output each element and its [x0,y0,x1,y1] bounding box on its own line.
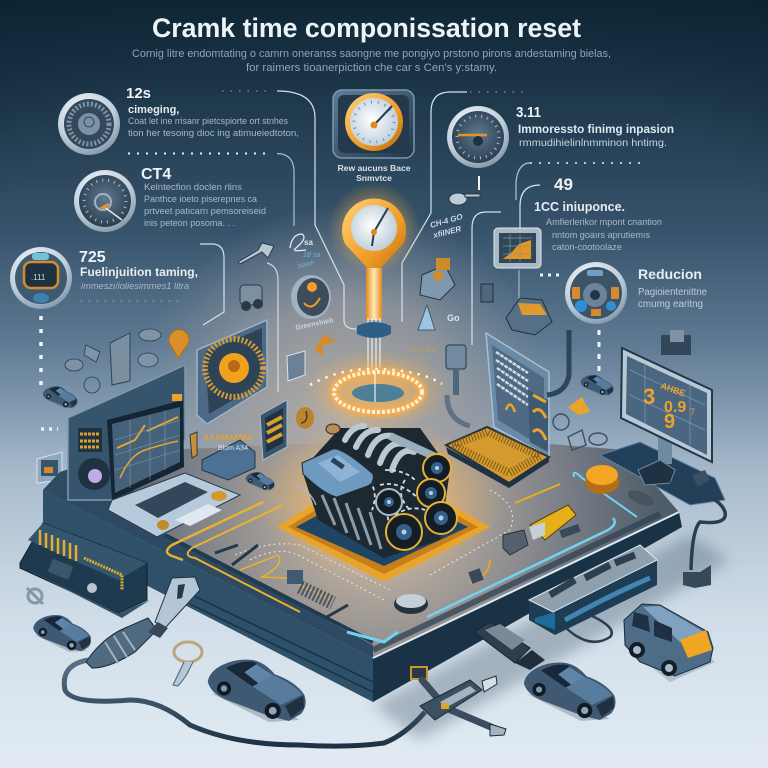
panel: central gauge: Rew aucuns Bace [337,163,411,173]
callout: 12s timing: 12s [126,85,151,102]
laptop keyboard [446,427,549,488]
callout: 725 fuel injection timing: immeszi/ioliesimmes1 litra [81,281,189,292]
callout: 49 1CC influence: 49 [554,175,573,194]
icon: grey tile [287,351,305,381]
icon: pump [420,258,455,300]
small clutter icons upper left [37,234,336,483]
icon: gold ingots [529,505,576,540]
icon: small lever [481,284,493,302]
callout: 12s timing: Coat let ine rrisanr pietcspiorte ort stnhes [128,116,288,127]
icon: orange coin [296,407,314,429]
icon: cable foot [683,565,711,588]
icon: wrench small [449,193,480,205]
pulleys [376,454,457,550]
label: upper caption: xfiINER [431,224,462,240]
track lines [167,473,637,642]
icon: round chip [394,594,428,614]
label: Qsa loop [290,234,320,270]
monitor screen: 7 [690,407,695,417]
callout: CT4: prtveet paticarn pemsoreiseid [144,206,266,217]
middle props on platform [190,400,348,618]
monitor screen: AHBE [659,380,687,399]
icon: glow ring with dotted halo [306,350,450,430]
icon: engine part [240,285,263,311]
cable boot [86,618,157,668]
cable from monitor [670,483,725,570]
icon: coin dial [291,275,331,319]
platform left side [43,490,373,702]
monitor screen: 9 [664,411,675,433]
right parts cluster [418,193,691,450]
icon: mini machine: Blom A34 [218,445,248,452]
gooseneck hose [547,330,569,395]
icon: tools on the track [215,545,348,618]
car: sedan center [208,660,306,722]
icon: orange tool [314,335,336,356]
icon: orange disc [585,465,619,494]
icon: finned pill [626,487,656,509]
lower fins [322,495,381,549]
icon: picture card [37,452,62,483]
silver tube [390,436,442,460]
icon: orange trace [470,560,490,583]
car: sedan right [524,663,616,721]
subtitle: Cornig litre endomtating o camrn oneranss saongne me pongiyo prstono pirons andestaming bielas, [132,48,611,60]
icon: round speed gauge [74,170,136,232]
callout: 3.11: Immoressto finimg inpasion [518,124,674,136]
panel: central gauge [333,90,414,183]
engine clutter [365,470,425,535]
platform [43,440,730,740]
icon: round dial 12s [58,93,120,155]
callout: 12s timing: tion her tesoing dioc ing atimueiedtoton, [128,128,299,139]
forked connector tool [411,667,506,736]
icon: dashboard gauge [447,106,509,168]
monitor screen: 3 [643,384,655,409]
callout: reduction: cmumg earitng [638,299,703,310]
oil cap [326,424,340,434]
callout: 12s timing [58,85,299,155]
back panel [68,365,185,500]
icon: tablet [260,400,287,460]
label: upper caption [429,212,464,240]
label: go: Go [447,313,460,323]
callout: CT4 [74,166,266,232]
callout: 49 1CC influence: caton-cootoolaze [552,242,622,253]
icon: orange stack [568,397,590,415]
valve cover [302,449,373,497]
engine block [302,428,450,558]
subtitle: for raimers tioanerpiction che car s Cen's y:stamy. [246,62,497,74]
icon: small car on platform [246,472,275,490]
monitor [600,348,725,588]
label: upper caption: CH-4 GO [429,212,464,230]
connector lines [41,91,640,429]
callout: 3.11 [447,104,674,168]
plug head [148,577,200,638]
intake ribs [345,426,414,470]
monitor screen: 0.9 [664,399,686,416]
callout: 49 1CC influence: Amfierlerikor mpont cnantion [546,217,662,228]
icon: chips [468,524,581,584]
right device box [529,545,657,642]
monitor stand [658,432,672,464]
icon: sketch gears [553,414,607,450]
callout: reduction [565,262,708,324]
callout: CT4: Panthce ioeto piserepnes ca [144,194,258,205]
icon: key [173,642,202,686]
label: Qsa loop: statch [297,259,316,270]
icon: gauge pin with tube [328,182,420,372]
label: Qsa loop: sa [304,238,313,247]
cable [64,660,425,746]
icon: tall module [110,333,130,385]
left hardware module [20,523,150,618]
center right laptop [408,330,569,488]
icon: flask [418,305,435,330]
small clutter icons upper left: Greenshieb [295,317,334,332]
callout: 725 fuel injection timing: Fuelinjuition taming, [80,265,198,279]
platform top surface [43,440,679,658]
desk unit [638,460,710,487]
right platform items [394,465,656,614]
left laptop and display [68,365,240,537]
icon: digital meter: .111 [31,273,46,282]
icon: orange car [506,298,552,335]
label: orange caption: A A AAAAAAAA [204,433,252,442]
callout: CT4: inis peteon posoma. . . [144,218,235,229]
callout: 725 fuel injection timing: 725 [79,249,106,266]
icon: gauge slab [197,320,267,424]
icon: small car [43,386,77,408]
callout: 3.11: 3.11 [516,104,541,121]
connector hose left: ###### [410,357,431,363]
connector hose left [408,345,470,426]
connector hose left: STRON [408,347,438,354]
label: Qsa loop: 18 sa [303,252,320,259]
icon: mini machine [202,440,255,480]
tangled hoses [296,485,316,505]
icon: gray cube [503,530,528,555]
left plug and cable [64,577,425,746]
icon: chart thumbnail [494,228,541,268]
icon: digital meter [10,247,72,309]
callout: 3.11: rmmudihielinlnmminon hntimg. [519,137,667,149]
icon: wrench [238,243,274,264]
panel: central gauge: Snmvtce [356,173,392,183]
icon: orange location pin [169,330,189,358]
callout: reduction: Pagioientenittne [638,287,708,298]
callout: 49 1CC influence: 1CC iniuponce. [534,199,625,214]
laptop base [108,473,240,537]
callout: 49 1CC influence: nntom goaırs aprutiemıs [552,230,650,241]
title: Cramk time componissation reset [152,13,581,43]
callout: 725 fuel injection timing [10,247,198,309]
icon: control dial [565,262,627,324]
engine base pad [277,493,490,582]
right plug [474,622,545,670]
callout: reduction: Reducion [638,266,702,282]
laptop screen [107,394,184,500]
platform right side [373,512,682,702]
icon: mini parts [65,329,161,393]
subtitle [132,48,611,74]
callout: CT4: CT4 [141,166,171,183]
icon: parts car [581,375,613,396]
icon: gear [27,588,43,604]
monitor base shelf [600,442,725,505]
monitor screen [621,348,712,462]
callout: 49 1CC influence [494,175,662,268]
icon: tiny figure [190,432,197,458]
car: van [624,604,715,682]
callout: CT4: Kelntecfion doclen rlins [144,182,242,193]
icon: ribbed strip [287,570,333,603]
engine [255,420,505,582]
callout: 12s timing: cimeging, [128,104,179,116]
car: coupe left [33,615,91,652]
laptop display [486,333,549,457]
icon: top right mini machine [661,330,691,355]
label: orange strip [515,484,560,503]
